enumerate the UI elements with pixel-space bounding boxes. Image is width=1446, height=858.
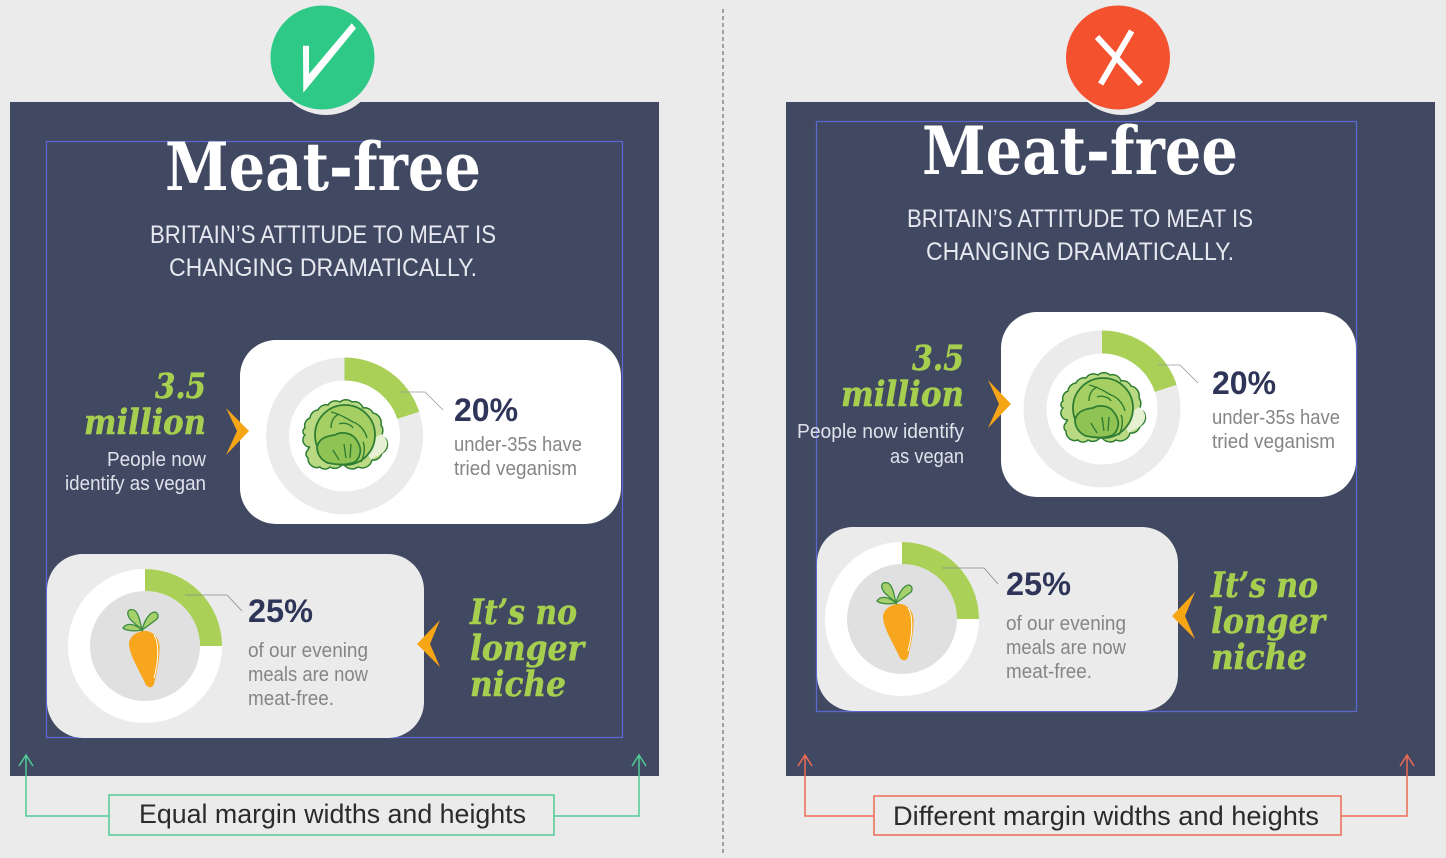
callout box, green [109,795,554,835]
icon: red cross badge [1066,6,1174,115]
subtitle, right [907,205,1253,266]
arrow: orange chevron left, left panel [417,620,440,667]
subtitle, right: BRITAIN’S ATTITUDE TO MEAT IS [907,205,1253,233]
margin guide rectangle, right [816,122,1356,712]
20 percent description, right [1212,407,1340,453]
stat: 3.5 million, left: 3.5 [155,366,206,407]
arrow: orange chevron right, left panel [226,408,249,455]
stat: 3.5 million, right: 3.5 [912,338,964,379]
20 percent description: under-35s have [454,434,582,456]
arrow: orange chevron right, right panel [988,380,1011,428]
card: 25% meat-free stat, right [817,527,1178,711]
slogan: it's no longer niche, left: It’s no [469,592,577,633]
stat: 3.5 million, left: People now [107,449,207,471]
slogan: it's no longer niche, left [469,592,586,705]
callout: different margins [798,755,1414,835]
25 percent figure: 25% [248,593,313,629]
title, right: Meat-free [922,112,1238,190]
icon: green check badge [270,6,378,115]
card: 25% meat-free stat, left [47,554,424,738]
icon: carrot [123,610,160,687]
panel: good example with equal margins [10,102,659,776]
stat: 3.5 million, left [65,366,207,495]
subtitle, left: BRITAIN’S ATTITUDE TO MEAT IS [150,221,496,249]
25 percent description, right: meat-free. [1006,661,1092,683]
donut chart 20% [278,358,419,503]
dashed centre divider [722,9,724,856]
25 percent description, right: meals are now [1006,637,1127,659]
callout text, green: Equal margin widths and heights [139,799,526,829]
donut chart 20%, right [1035,330,1177,476]
subtitle, left: CHANGING DRAMATICALLY. [169,254,477,282]
25 percent description: meals are now [248,664,369,686]
slogan: it's no longer niche, right: longer [1211,601,1327,642]
20 percent description: tried veganism [454,458,577,480]
stat: 3.5 million, right [797,338,964,468]
25 percent description: of our evening [248,640,368,662]
panel: bad example with different margins [786,102,1435,776]
card: 20% vegan stat, left [240,340,621,524]
25 percent description, right [1006,613,1127,683]
slogan: it's no longer niche, right [1210,565,1327,678]
bracket arrows, red [798,755,1414,816]
stat: 3.5 million, left: million [84,402,206,443]
slogan: it's no longer niche, left: niche [470,664,566,705]
stat: 3.5 million, left: identify as vegan [65,473,206,495]
20 percent figure: 20% [454,392,518,428]
icon: cabbage [303,400,387,469]
slogan: it's no longer niche, left: longer [470,628,586,669]
callout: equal margins [19,755,646,835]
25 percent description: meat-free. [248,688,334,710]
20 percent description, right: tried veganism [1212,431,1335,453]
arrow: orange chevron left, right panel [1172,592,1195,639]
stat: 3.5 million, right: People now identify [797,421,964,443]
25 percent description, right: of our evening [1006,613,1126,635]
25 percent description [248,640,369,710]
20 percent figure, right: 20% [1212,365,1276,401]
bracket arrows, green [19,755,646,816]
25 percent figure, right: 25% [1006,566,1071,602]
20 percent description, right: under-35s have [1212,407,1340,429]
icon: cabbage, right [1061,373,1145,442]
slogan: it's no longer niche, right: It’s no [1210,565,1318,606]
donut chart 25%, right [836,542,979,685]
margin guide rectangle, left [46,142,622,738]
title, left: Meat-free [165,128,481,206]
callout text, red: Different margin widths and heights [893,801,1319,831]
20 percent description [454,434,582,480]
donut chart 25% [79,569,222,712]
subtitle, right: CHANGING DRAMATICALLY. [926,238,1234,266]
icon: carrot, right [877,583,914,660]
card: 20% vegan stat, right [1001,312,1356,497]
slogan: it's no longer niche, right: niche [1211,637,1307,678]
stat: 3.5 million, right: million [841,374,964,415]
callout box, red [874,796,1341,835]
subtitle, left [150,221,496,282]
stat: 3.5 million, right: as vegan [890,446,964,468]
